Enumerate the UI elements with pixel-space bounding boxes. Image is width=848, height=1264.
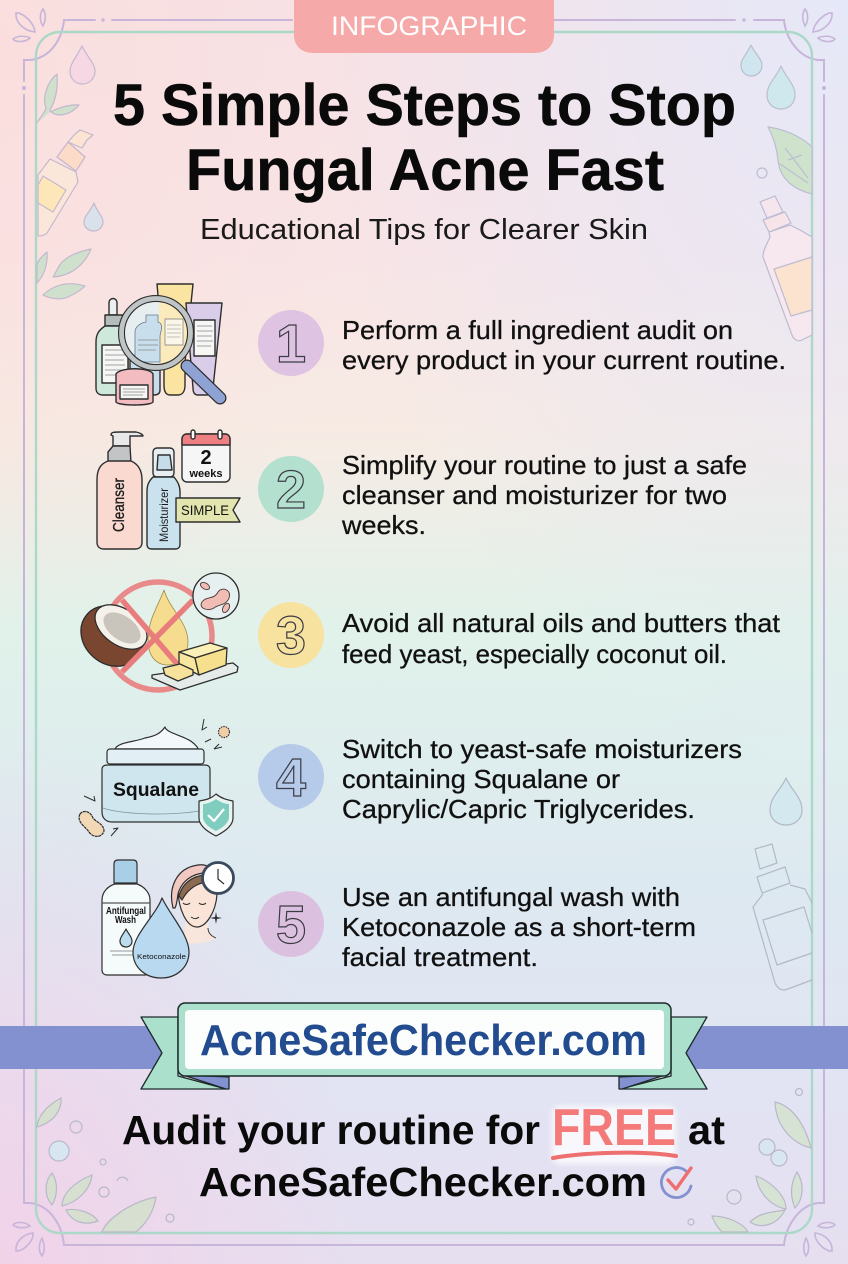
step 4 (79, 719, 742, 836)
step 2 text (341, 450, 747, 540)
icon: antifungal wash and face: Wash (115, 914, 136, 926)
icon: cleanser, moisturizer, calendar: weeks (188, 468, 223, 480)
step 5 text: Ketoconazole as a short-term (342, 912, 696, 942)
number badge 3: 3 (276, 606, 306, 666)
step 4 text (342, 734, 742, 824)
icon: cleanser, moisturizer, calendar: SIMPLE (181, 502, 229, 518)
step 4 text: Switch to yeast-safe moisturizers (342, 734, 742, 764)
call to action (122, 1099, 725, 1205)
step 2 text: weeks. (341, 510, 426, 540)
title (113, 73, 736, 203)
website ribbon banner (0, 1003, 848, 1089)
step 3 text (342, 608, 781, 669)
step 3 text: Avoid all natural oils and butters that (342, 608, 781, 638)
step 2 text: Simplify your routine to just a safe (342, 450, 747, 480)
number badge 2 (258, 456, 324, 522)
step 2 text: cleanser and moisturizer for two (342, 480, 727, 510)
step 1 text: every product in your current routine. (342, 345, 786, 375)
icon: cleanser, moisturizer, calendar: Cleanser (111, 478, 128, 532)
subtitle: Educational Tips for Clearer Skin (200, 214, 648, 246)
icon: squalane jar with shield: Squalane (113, 779, 199, 801)
icon: antifungal wash and face: Ketoconazole (137, 952, 186, 961)
decorations: middle right (753, 778, 812, 990)
step 4 text: Caprylic/Capric Triglycerides. (342, 794, 695, 824)
top tab: INFOGRAPHIC (294, 0, 554, 53)
icon: check badge (661, 1168, 691, 1198)
icon: cleanser, moisturizer, calendar: Moisturizer (157, 488, 171, 542)
decorations: bottom right (688, 1088, 811, 1232)
step 3 text: feed yeast, especially coconut oil. (342, 639, 727, 669)
step 4 text: containing Squalane or (342, 764, 620, 794)
icon: antifungal wash and face (102, 860, 234, 978)
step 5 (102, 860, 696, 978)
step 1 (96, 284, 786, 405)
number badge 2: 2 (276, 460, 306, 520)
step 5 text: facial treatment. (342, 942, 538, 972)
title: 5 Simple Steps to Stop (113, 73, 736, 138)
number badge 5: 5 (276, 895, 306, 955)
call to action: at (688, 1107, 725, 1153)
banner website text: AcneSafeChecker.com (200, 1016, 647, 1065)
call to action: AcneSafeChecker.com (199, 1159, 647, 1205)
step 3 (69, 573, 781, 690)
icon: cleanser, moisturizer, calendar (97, 430, 240, 549)
step 1 text (342, 315, 786, 375)
icon: squalane jar with shield (79, 719, 233, 836)
decorations: top left (37, 46, 103, 299)
top tab: INFOGRAPHIC: INFOGRAPHIC (331, 11, 527, 41)
icon: no oils, coconut, butter (69, 573, 239, 690)
number badge 1 (258, 310, 324, 376)
step 1 text: Perform a full ingredient audit on (342, 315, 733, 345)
call to action: Audit your routine for (122, 1107, 540, 1153)
number badge 1: 1 (276, 314, 306, 374)
icon: cleanser, moisturizer, calendar: 2 (200, 447, 212, 469)
number badge 4 (258, 744, 324, 810)
number badge 3 (258, 602, 324, 668)
icon: antifungal wash and face: Antifungal (106, 905, 146, 917)
step 5 text: Use an antifungal wash with (342, 882, 680, 912)
decorations: top right (741, 45, 812, 341)
number badge 5 (258, 891, 324, 957)
step 2 (97, 430, 747, 549)
decorations: bottom left (37, 1098, 174, 1232)
FREE highlight: FREE (552, 1099, 676, 1157)
icon: products under magnifying glass (96, 284, 222, 405)
number badge 4: 4 (276, 748, 306, 808)
title: Fungal Acne Fast (186, 138, 664, 203)
step 5 text (342, 882, 696, 972)
